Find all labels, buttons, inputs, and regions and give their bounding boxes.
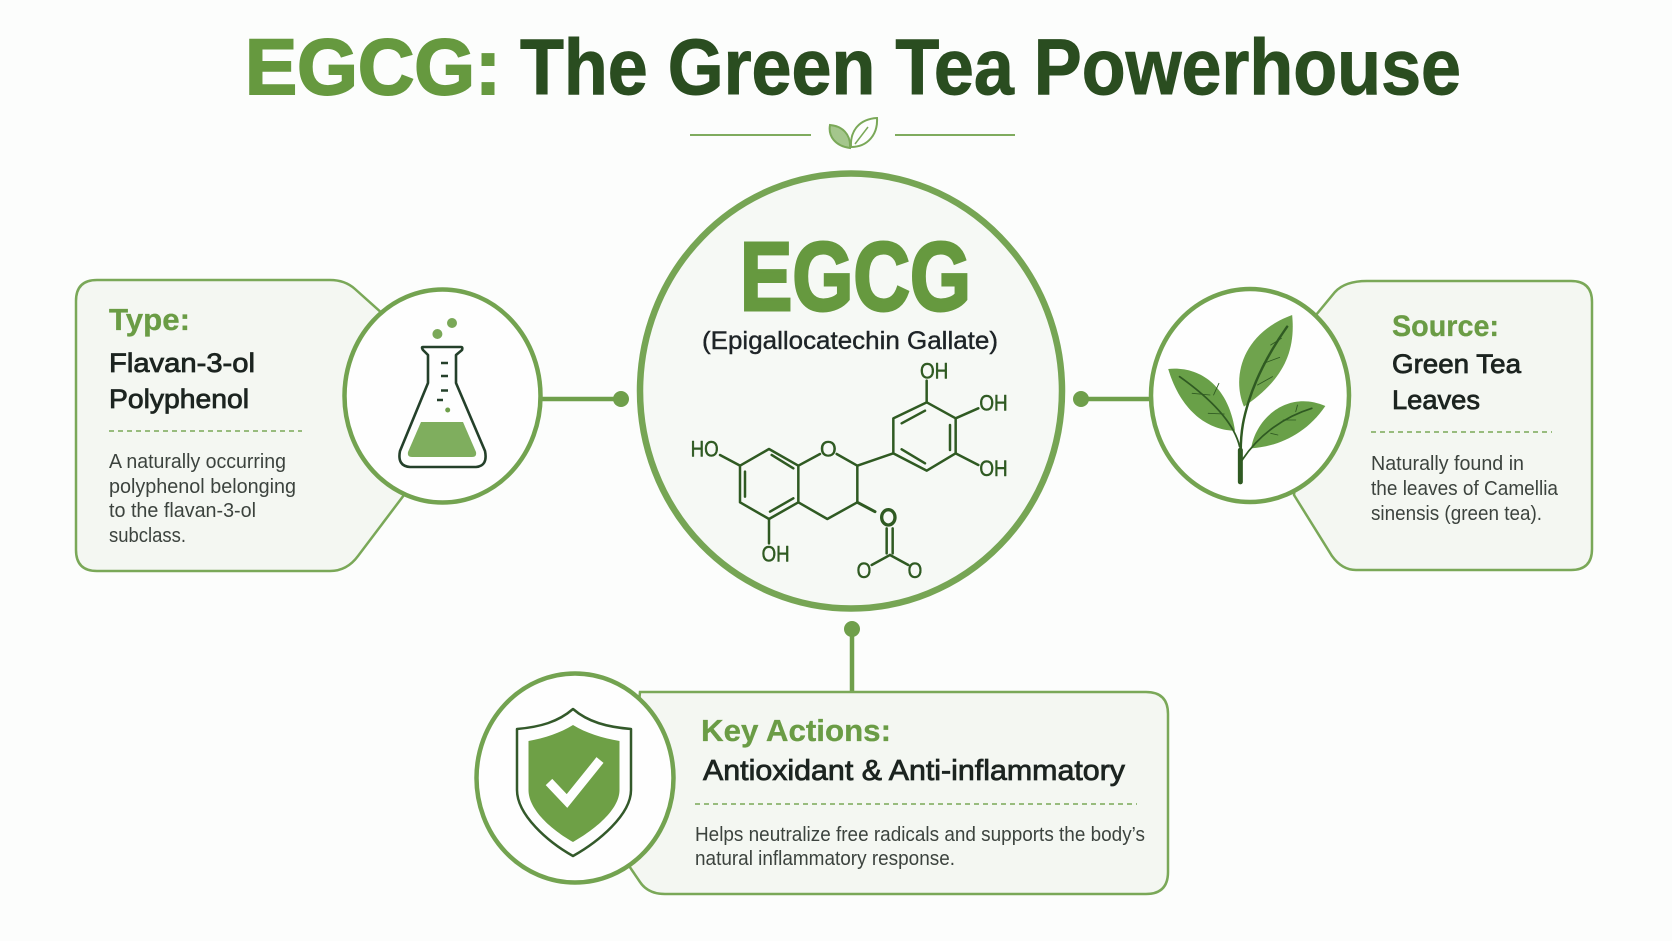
value: flavan-3-ol polyphenol: [109, 348, 255, 414]
description: key actions: [695, 824, 1145, 870]
description: source: Naturally found in: [1371, 453, 1524, 475]
description: type: A naturally occurring: [109, 451, 286, 473]
title: EGCG:: [245, 22, 501, 111]
molecule diagram: OH: [979, 391, 1008, 416]
value: green tea leaves: Green Tea: [1392, 349, 1522, 379]
value: flavan-3-ol polyphenol: Flavan-3-ol: [109, 348, 255, 378]
heading: type: Type:: [109, 302, 190, 337]
molecule diagram: O: [857, 558, 871, 583]
description: source: [1371, 453, 1559, 525]
description: key actions: natural inflammatory response.: [695, 848, 955, 870]
connector: type to centre: [540, 391, 629, 407]
description: source: sinensis (green tea).: [1371, 503, 1542, 525]
value: green tea leaves: [1392, 349, 1522, 415]
connector: centre to key actions: [844, 621, 860, 693]
molecule diagram: OH: [762, 542, 790, 567]
icon circle: flask: [344, 290, 540, 502]
icon: flask: [399, 318, 486, 467]
icon: shield with check: [517, 709, 631, 856]
centre circle: [640, 174, 1062, 608]
molecule diagram: [691, 358, 1008, 583]
molecule diagram: O: [908, 558, 922, 583]
title divider with leaf icon: [690, 118, 1015, 148]
molecule diagram: O: [820, 437, 837, 462]
heading: source: Source:: [1392, 310, 1499, 343]
heading: key actions: Key Actions:: [701, 713, 891, 748]
title: The Green Tea Powerhouse: [520, 22, 1461, 111]
molecule diagram: OH: [979, 456, 1008, 481]
molecule diagram: OH: [920, 358, 948, 383]
molecule diagram: HO: [691, 437, 719, 462]
value: green tea leaves: Leaves: [1392, 385, 1480, 415]
icon circle: shield: [476, 674, 674, 882]
panel outline: source: [1294, 281, 1592, 570]
panel outline: key actions: [625, 692, 1168, 894]
panel: source: [1294, 281, 1592, 570]
description: key actions: Helps neutralize free radicals and supports the body’s: [695, 824, 1145, 846]
centre heading: EGCG: EGCG: [740, 222, 971, 331]
value: flavan-3-ol polyphenol: Polyphenol: [109, 384, 249, 414]
panel: type: [76, 280, 404, 571]
value: antioxidant and anti-inflammatory: Antioxidant & Anti-inflammatory: [703, 755, 1126, 787]
description: type: subclass.: [109, 525, 186, 547]
description: type: polyphenol belonging: [109, 476, 296, 498]
icon: tea sprig: [1168, 315, 1325, 482]
panel outline: type: [76, 280, 404, 571]
icon circle: tea leaves: [1151, 289, 1349, 502]
panel: key actions: [625, 692, 1168, 894]
description: type: to the flavan-3-ol: [109, 500, 256, 522]
description: type: [109, 451, 296, 547]
centre subtitle: (Epigallocatechin Gallate): [702, 327, 998, 355]
connector: source to centre: [1073, 391, 1152, 407]
description: source: the leaves of Camellia: [1371, 478, 1559, 500]
